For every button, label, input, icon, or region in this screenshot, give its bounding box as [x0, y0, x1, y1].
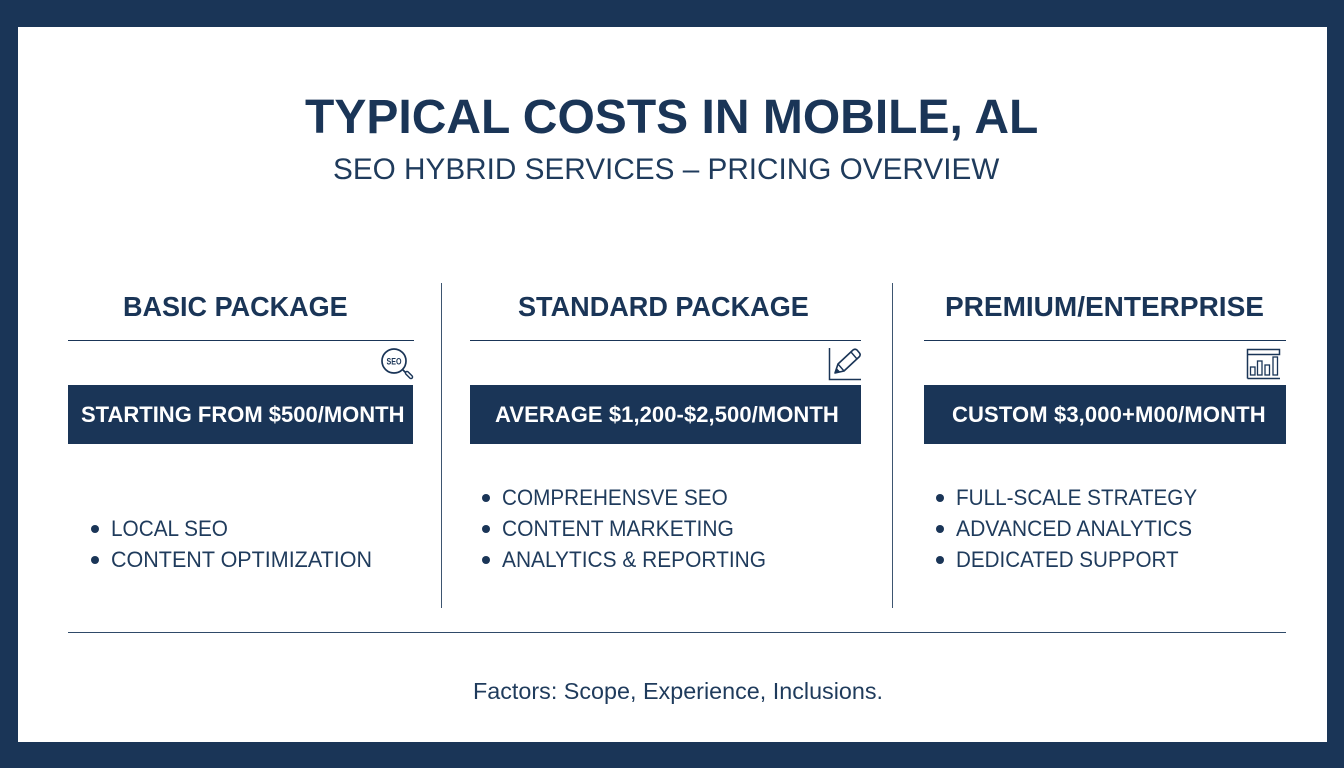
icon: pencil chart	[828, 348, 861, 380]
feature: advanced analytics: ADVANCED ANALYTICS	[956, 516, 1192, 541]
icon: bar chart	[1246, 348, 1280, 380]
bullet	[482, 494, 490, 502]
price text: premium: CUSTOM $3,000+M00/MONTH	[952, 402, 1266, 427]
footer rule	[68, 632, 1286, 633]
feature: local seo: LOCAL SEO	[111, 516, 228, 541]
feature: comprehensive seo: COMPREHENSVE SEO	[502, 485, 728, 510]
divider	[441, 283, 442, 608]
title: TYPICAL COSTS IN MOBILE, AL	[305, 91, 1038, 144]
price text: standard: AVERAGE $1,200-$2,500/MONTH	[495, 402, 839, 427]
price text: basic: STARTING FROM $500/MONTH	[81, 402, 405, 427]
feature: content optimization: CONTENT OPTIMIZATION	[111, 547, 372, 572]
feature: analytics: ANALYTICS & REPORTING	[502, 547, 766, 572]
subtitle: SEO HYBRID SERVICES – PRICING OVERVIEW	[333, 153, 999, 186]
price bar: standard	[470, 385, 861, 444]
divider	[892, 283, 893, 608]
icon: SEO magnifier	[381, 348, 414, 380]
heading: premium/enterprise: PREMIUM/ENTERPRISE	[945, 291, 1264, 322]
feature: full-scale strategy: FULL-SCALE STRATEGY	[956, 485, 1197, 510]
icon: SEO magnifier: SEO	[386, 356, 402, 368]
heading rule	[924, 340, 1286, 341]
footer note: Factors: Scope, Experience, Inclusions.	[473, 678, 883, 704]
bullet	[936, 525, 944, 533]
feature: content marketing: CONTENT MARKETING	[502, 516, 734, 541]
feature list: basic	[91, 516, 372, 572]
feature list: standard	[482, 485, 766, 572]
bullet	[936, 494, 944, 502]
bullet	[482, 556, 490, 564]
bullet	[91, 525, 99, 533]
bullet	[936, 556, 944, 564]
panel: standard package	[470, 291, 861, 572]
price bar: basic	[68, 385, 413, 444]
bullet	[91, 556, 99, 564]
panel: premium/enterprise	[924, 291, 1286, 572]
bullet	[482, 525, 490, 533]
price bar: premium	[924, 385, 1286, 444]
heading rule	[68, 340, 414, 341]
feature list: premium	[936, 485, 1197, 572]
heading: standard package: STANDARD PACKAGE	[518, 291, 809, 322]
heading: basic package: BASIC PACKAGE	[123, 291, 348, 322]
feature: dedicated support: DEDICATED SUPPORT	[956, 547, 1179, 572]
heading rule	[470, 340, 861, 341]
panel: basic package	[68, 291, 414, 572]
